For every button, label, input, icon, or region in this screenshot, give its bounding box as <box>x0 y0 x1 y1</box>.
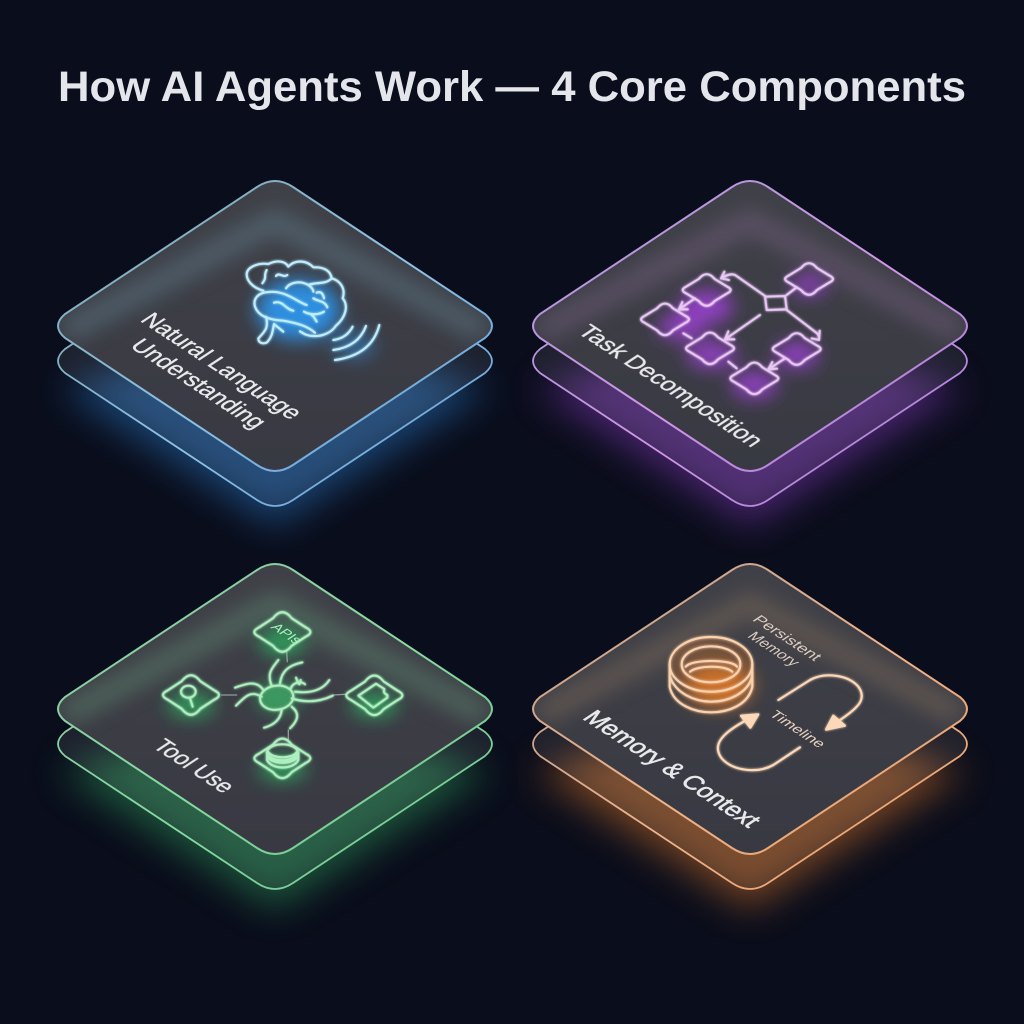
icon and label: spider with tools <box>147 612 402 797</box>
icon: timeline loop arrows <box>718 675 862 770</box>
icon: flowchart nodes and arrows <box>641 263 833 394</box>
label: Natural Language: Natural Language <box>135 308 309 423</box>
upper plate <box>533 564 967 854</box>
node boxes <box>641 263 833 394</box>
title: How AI Agents Work — 4 Core Components <box>58 63 966 111</box>
icon: connectors <box>222 652 345 739</box>
tool box: database <box>254 739 310 778</box>
plate sheen band <box>65 604 485 715</box>
under-glow: purple <box>535 316 965 526</box>
panel: tool use <box>58 564 492 909</box>
plate outline <box>533 181 967 471</box>
upper plate <box>58 564 492 854</box>
under-glow: green <box>60 699 490 909</box>
icon halo <box>685 663 752 707</box>
lower plate <box>58 216 492 506</box>
icon halo <box>168 628 398 780</box>
label: Task Decomposition: Task Decomposition <box>572 320 771 451</box>
icon: brain <box>247 261 379 360</box>
label: Tool Use: Tool Use <box>147 734 242 797</box>
lower plate <box>58 599 492 889</box>
under-glow: blue <box>60 316 490 526</box>
plate sheen band <box>65 221 485 332</box>
tool box: search <box>163 675 219 715</box>
label: Timeline: Timeline <box>766 708 830 750</box>
tool box: document <box>346 676 402 715</box>
under-glow: orange <box>535 699 965 909</box>
icon and label: brain with sound waves <box>125 261 379 432</box>
plate outline <box>58 564 492 854</box>
plate outline <box>533 564 967 854</box>
icon halo <box>257 280 375 358</box>
icon: spider and tool boxes <box>163 612 402 778</box>
lower plate <box>533 599 967 889</box>
icon: memory rings <box>670 637 752 712</box>
lower plate <box>533 216 967 506</box>
label: Memory (small): Memory <box>743 630 804 670</box>
panel: memory and context <box>533 564 967 909</box>
panel: task decomposition <box>533 181 967 526</box>
upper plate <box>58 181 492 471</box>
plate sheen band <box>540 604 960 715</box>
tool box: APIs <box>254 612 310 652</box>
icon halo <box>658 275 827 398</box>
label: Memory and Context: Memory & Context <box>577 706 768 832</box>
panel: natural language understanding <box>58 181 492 526</box>
plate outline <box>58 181 492 471</box>
label: Understanding: Understanding <box>125 334 273 432</box>
upper plate <box>533 181 967 471</box>
plate sheen band <box>540 221 960 332</box>
label: Persistent: Persistent <box>748 613 825 664</box>
label: APIs: APIs <box>267 621 306 646</box>
icon and label: flowchart <box>572 263 833 451</box>
icon and label: memory rings and timeline loop <box>577 613 862 832</box>
